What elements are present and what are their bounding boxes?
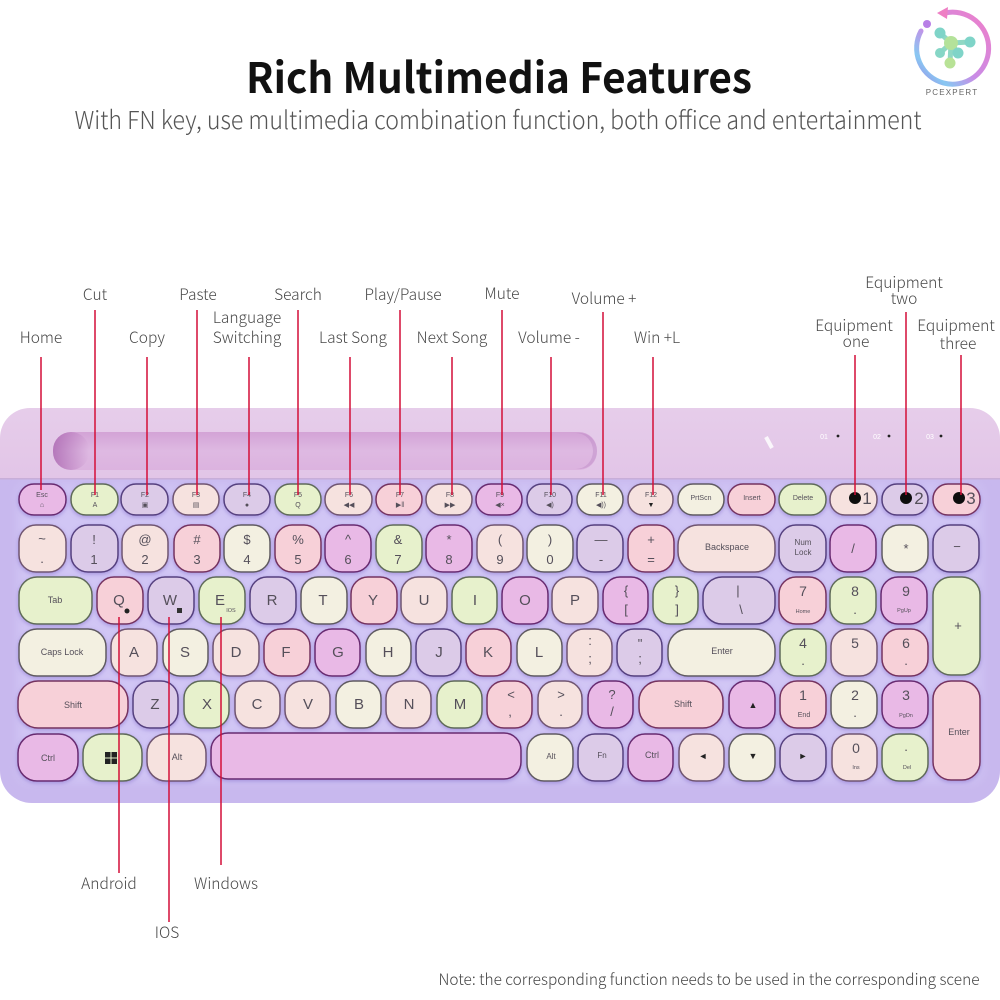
keys: QWERTY row: W [163,592,178,609]
keys: number row: 8 [445,552,453,567]
keys: number row: % [292,532,304,547]
keys: ZXCV row: . [853,705,857,720]
keys: ZXCV row: < [507,687,515,702]
keys: function row: 2 [914,489,924,508]
keys: ASDF row: L [535,644,543,661]
callout: Equipment two: two [891,287,917,309]
keys: ASDF row: 5 [851,635,859,651]
keys: ZXCV row: Shift [64,700,83,710]
keyboard body [0,408,1000,803]
keys: number row: & [394,532,403,547]
callout: Equipment two: Equipment [865,271,943,293]
callout: Next Song: Next Song [417,326,488,348]
keys: number row: 7 [394,552,402,567]
keys: QWERTY row: | [736,583,740,598]
keys: number row: 5 [294,552,302,567]
keys: QWERTY row: Tab [48,595,62,605]
keys: ASDF row: 4 [799,635,807,651]
keys: bottom row: ► [799,751,807,761]
keys: number row: / [851,541,855,556]
keys: number row: 4 [243,552,251,567]
keys: ZXCV row: B [354,696,364,713]
keys: number row: + [647,532,655,547]
keys: QWERTY row: 8 [851,583,859,599]
keys: function row: ◀◀ [344,502,355,509]
keys: function row: F10 [544,492,556,499]
callout: Last Song: Last Song [319,326,388,348]
callout: Search: Search [274,283,322,305]
keys: function row: A [93,502,98,509]
keys: bottom row: ◄ [699,751,707,761]
keys: QWERTY row: I [473,592,477,609]
callout: Equipment three: Equipment [917,314,995,336]
keys: ZXCV row: , [508,704,512,719]
keys: ZXCV row: . [559,704,563,719]
keys: QWERTY row: 7 [799,583,807,599]
callout: Equipment one: Equipment [815,314,893,336]
keys: ASDF row: : [588,633,592,648]
icon: PCEXPERT logo: PCEXPERT [926,88,978,97]
footnote: Note: the corresponding function needs to be used in the corresponding scene [438,966,980,990]
keys: number row: * [446,532,452,547]
keys: QWERTY row: { [624,583,629,598]
keys: number row: 3 [193,552,201,567]
keys: bottom row: Del [903,765,911,771]
keys: bottom row: Fn [597,751,607,760]
keys: number row: 6 [344,552,352,567]
keys: ZXCV row: > [557,687,565,702]
keys: function row: F11 [595,492,607,499]
keys: ASDF row: S [180,644,190,661]
keys: function row: F9 [496,492,504,499]
keys: QWERTY row [19,577,980,675]
keys: ASDF row: G [332,644,344,661]
keys: ZXCV row [18,681,980,780]
callout: Mute: Mute [485,282,519,304]
keys: number row: − [953,539,961,554]
keys: bottom row: 0 [852,740,860,756]
keys: ASDF row: . [801,653,805,668]
keys: ZXCV row: C [252,696,263,713]
keys: QWERTY row: O [519,592,531,609]
keys: function row: ◀× [495,502,505,509]
keys: bottom row: Alt [172,752,183,762]
keys: ASDF row: A [129,644,139,661]
keys: number row: ~ [38,531,46,546]
keys: bottom row [18,733,928,781]
callout: Cut: Cut [83,283,108,305]
keys: ZXCV row: X [202,696,212,713]
keys: function row: 1 [862,489,872,508]
keys: number row: Num [795,538,812,547]
keys: ZXCV row: Enter [948,727,970,737]
keyboard body: 02 [873,434,881,441]
keys: ASDF row: J [435,644,443,661]
callout: Equipment two [865,271,943,495]
keys: QWERTY row: IOS [226,608,236,614]
callout: Equipment three [917,314,995,495]
callout: Equipment one [815,314,893,495]
keys: QWERTY row: + [954,618,962,633]
callout: Language Switching: Switching [213,326,282,348]
callout: Equipment one: one [843,330,869,352]
subtitle: With FN key, use multimedia combination function, both office and entertainment [74,101,922,137]
keys: bottom row: . [904,739,908,754]
callout: Copy: Copy [129,326,165,348]
keys: number row: # [193,532,201,547]
keys: ASDF row: " [638,636,643,651]
callout: Paste: Paste [179,283,217,305]
keys: bottom row: Ctrl [645,750,659,760]
keys: number row: ( [498,532,503,547]
keys: number row: - [599,552,603,567]
keys: ZXCV row: ? [608,687,616,702]
keys: ASDF row [19,629,928,676]
keys: function row [19,484,980,515]
keys: function row: ▶‖ [396,502,404,509]
icon: PCEXPERT logo [917,7,989,97]
keys: ZXCV row: 1 [799,687,807,703]
keys: ZXCV row: Shift [674,699,693,709]
keys: number row: $ [243,532,251,547]
keys: bottom row: Ins [852,765,860,771]
keys: ASDF row: . [904,653,908,668]
keys: ZXCV row: ▲ [749,700,757,710]
keys: QWERTY row: T [318,592,328,609]
keys: QWERTY row: Q [113,592,125,609]
keys: function row: 3 [966,489,976,508]
callout: Windows: Windows [194,872,258,894]
keys: function row: F4 [243,492,251,499]
keys: function row: ◀) [546,502,554,509]
keys: bottom row: ▼ [749,751,757,761]
callout: Language Switching: Language [213,306,281,328]
keys: ZXCV row: 2 [851,687,859,703]
keys: ASDF row: D [231,644,242,661]
keys: function row: F2 [141,492,149,499]
keyboard body: 01 [820,434,828,441]
callout: Home: Home [20,326,62,348]
keys: ASDF row: ; [638,651,642,666]
keys: number row [19,525,979,572]
keys: number row: ! [92,532,96,547]
keys: ZXCV row: PgDn [899,713,913,719]
keys: ASDF row: Caps Lock [41,647,84,657]
keys: function row: Delete [793,495,813,502]
keys: number row: ^ [345,532,352,547]
keys: number row: 0 [546,552,554,567]
keys: ZXCV row: End [798,712,810,719]
keys: number row: . [40,551,44,566]
callout: Play/Pause: Play/Pause [364,283,442,305]
callout: IOS: IOS [155,921,179,943]
keys: ASDF row: F [281,644,291,661]
keys: number row: ) [548,532,552,547]
keys: QWERTY row: \ [739,602,743,617]
keys: number row: * [903,541,909,556]
keys: function row: F6 [345,492,353,499]
keys: number row: Backspace [705,542,749,552]
keys: number row: Lock [795,548,812,557]
keys: function row: ▼ [648,502,654,509]
keys: number row: 9 [496,552,504,567]
keys: function row: ▶▶ [445,502,456,509]
keys: function row: Insert [743,495,761,502]
keys: ASDF row: H [383,644,393,661]
keys: ZXCV row: 3 [902,687,910,703]
keys: function row: Q [295,502,301,509]
keys: QWERTY row: . [853,602,857,617]
keys: QWERTY row: Home [796,609,810,615]
keys: ASDF row: Enter [711,646,733,656]
keys: function row: F1 [91,492,99,499]
keys: function row: Esc [36,492,48,499]
keys: number row: 2 [141,552,149,567]
keys: function row: F7 [396,492,404,499]
keys: number row: 1 [90,552,98,567]
keys: function row: PrtScn [690,495,712,502]
keys: number row: = [647,552,655,567]
keys: ASDF row: 6 [902,635,910,651]
keys: ZXCV row: M [454,696,466,713]
keys: function row: F8 [446,492,454,499]
keys: QWERTY row: 9 [902,583,910,599]
title: Rich Multimedia Features [246,45,752,106]
callout: Language Switching [213,306,282,495]
keys: QWERTY row: R [267,592,278,609]
keys: ASDF row: ; [588,651,592,666]
keys: QWERTY row: [ [624,602,628,617]
keys: function row: ▣ [142,502,148,509]
keys: ZXCV row: N [404,696,414,713]
keys: QWERTY row: Y [368,592,378,609]
keys: function row: F12 [645,492,657,499]
keys: QWERTY row: ] [675,602,679,617]
keys: QWERTY row: } [675,583,680,598]
callout: Equipment three: three [940,332,976,354]
keys: ZXCV row: V [303,696,313,713]
keys: ASDF row: K [483,644,493,661]
keys: QWERTY row: E [215,592,225,609]
keys: number row: @ [138,532,152,547]
callout: Win +L: Win +L [634,326,680,348]
keys: QWERTY row: P [570,592,580,609]
keys: function row: F3 [192,492,200,499]
keys: QWERTY row: U [419,592,429,609]
keys: bottom row: Alt [546,752,556,761]
keyboard body: 03 [926,434,934,441]
keys: function row: ▤ [193,502,199,509]
keys: function row: ● [245,502,249,509]
callout: Android: Android [81,872,137,894]
callout: Volume +: Volume + [572,287,636,309]
keys: bottom row: Ctrl [41,753,55,763]
keys: function row: ⌂ [40,502,44,509]
callout: Volume -: Volume - [518,326,580,348]
keys: QWERTY row: PgUp [897,608,911,614]
keys: ZXCV row: / [610,704,614,719]
keys: number row: — [594,532,608,547]
keys: ZXCV row: Z [150,696,160,713]
keys: function row: F5 [294,492,302,499]
keys: function row: ◀)) [596,502,606,509]
